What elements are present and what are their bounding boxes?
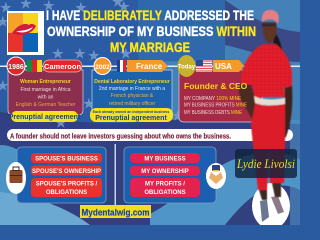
timeline: today USA: Today [178, 64, 196, 70]
timeline: today USA [178, 55, 244, 77]
timeline: 1986 Cameroon: 1986 [8, 64, 24, 71]
panel: dental laboratory entrepreneur: French physician & [111, 93, 154, 99]
founder text [184, 81, 248, 116]
website label: Mydentalwig.com [82, 207, 150, 217]
panel: dental laboratory entrepreneur: Dental Laboratory Entrepreneur [94, 79, 170, 85]
icon: handshake and crown [206, 163, 226, 189]
panel: founder and CEO [179, 70, 262, 122]
title: MY MARRIAGE [110, 40, 190, 55]
panel: my side: MY PROFITS / [145, 182, 185, 188]
background: flag and waves: ★ [83, 96, 95, 111]
timeline: 2002 France [94, 58, 168, 74]
banner statement [7, 129, 293, 141]
title: I HAVE DELIBERATELY ADDRESSED THE [46, 8, 254, 23]
panel: woman entrepreneur: with an [38, 94, 54, 100]
panel: my side: OBLIGATIONS [144, 190, 186, 196]
red outfit [241, 44, 292, 97]
panel: dental laboratory entrepreneur: 2nd marriage in France with a [99, 86, 165, 92]
title [46, 8, 256, 55]
shoes ellipse [252, 183, 290, 229]
timeline: today USA: USA [215, 62, 232, 71]
head and scarf [262, 10, 282, 52]
legs [251, 104, 285, 190]
panel: woman entrepreneur: English & German Teacher [16, 102, 76, 108]
background: flag and waves: ★ [120, 46, 132, 61]
panel: spouse's side: OBLIGATIONS [46, 190, 87, 196]
timeline: 2002 France: 2002 [95, 64, 110, 71]
founder text: MY COMPANY 100% MINE [184, 96, 242, 102]
person [239, 10, 292, 200]
timeline line [0, 66, 300, 67]
founder text: Founder & CEO [184, 81, 248, 91]
title: OWNERSHIP OF MY BUSINESS WITHIN [47, 24, 256, 39]
arms [239, 82, 267, 137]
background: flag and waves: ★ [52, 46, 64, 61]
icon: briefcase [6, 162, 26, 194]
panel: spouse's side [17, 147, 106, 203]
panel: my side [124, 147, 216, 203]
icon: lips [12, 24, 36, 35]
prenuptial badge 1: Prenuptial agreement [9, 114, 81, 121]
timeline: 1986 Cameroon: Cameroon [44, 62, 81, 71]
background: flag and waves: ★ [74, 46, 86, 61]
background: flag and waves: ★ [75, 0, 87, 15]
panel: woman entrepreneur: First marriage in Africa [20, 87, 71, 93]
prenuptial badge 2 [90, 108, 173, 122]
panel: my side: MY BUSINESS [144, 156, 186, 162]
panel: spouse's side: SPOUSE'S OWNERSHIP [32, 169, 101, 175]
panel: woman entrepreneur: Woman Entrepreneur [20, 79, 71, 85]
timeline: 2002 France: France [136, 62, 163, 71]
background: flag and waves: ★ [55, 115, 67, 130]
banner statement: A founder should not leave investors guessing about who owns the business. [10, 134, 231, 140]
divider [114, 144, 116, 209]
timeline: 1986 Cameroon [7, 57, 82, 75]
panel: spouse's side: SPOUSE'S PROFITS / [36, 182, 98, 188]
panel: my side: MY OWNERSHIP [141, 169, 189, 175]
background: flag and waves: ★ [88, 48, 100, 63]
white belt [254, 96, 285, 105]
logo [7, 11, 44, 55]
founder text: MY BUSINESS PROFITS MINE [184, 102, 248, 108]
panel: spouse's side: SPOUSE'S BUSINESS [35, 156, 98, 162]
panel: dental laboratory entrepreneur [90, 70, 173, 122]
panel: dental laboratory entrepreneur: retired military officer [109, 101, 155, 107]
background: flag and waves: ★ [172, 108, 184, 123]
panel: woman entrepreneur [8, 70, 83, 122]
prenuptial badge 2: Prenuptial agreement [95, 115, 167, 122]
founder text: MY BUSINESS DEBTS MINE [184, 110, 243, 116]
background: flag and waves: ★ [0, 0, 12, 15]
signature card [235, 149, 297, 178]
prenuptial badge 2: Each already owned an independent business [93, 110, 169, 114]
